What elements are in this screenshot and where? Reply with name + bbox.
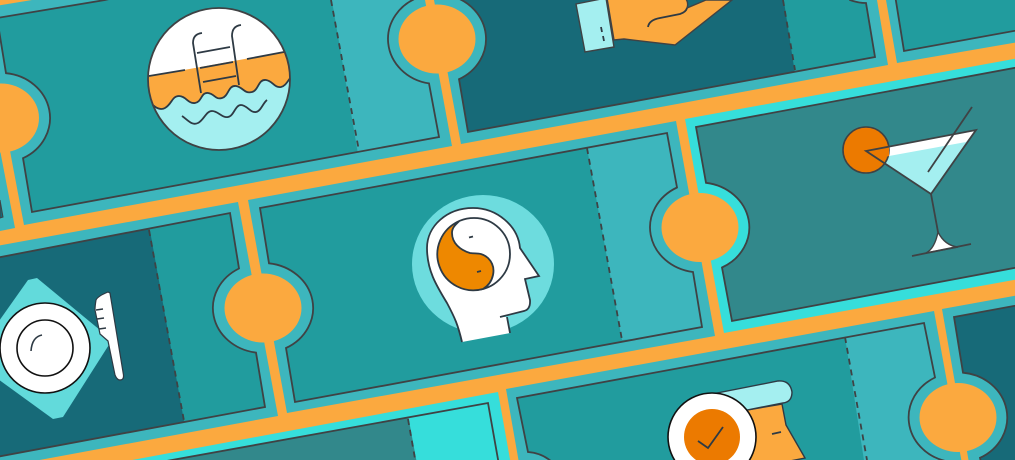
icon: head with checkmark badge: [668, 381, 805, 460]
ticket: top right: [886, 0, 1015, 63]
far left ticket sliver: [0, 150, 15, 231]
ticket: checkmark: [506, 311, 970, 460]
ticket: bottom cyan: [100, 392, 511, 460]
ticket: mind: [248, 120, 720, 413]
ticket: hand: [434, 0, 900, 144]
ticket: plate: [0, 202, 280, 460]
icon: hand: [576, 0, 732, 52]
icon: plate and knife: [0, 278, 124, 419]
icon: pool with ladder: [147, 7, 291, 151]
ticket: cocktail: [685, 56, 1015, 333]
icon: head with yin yang: [412, 195, 554, 342]
icon: cocktail glass: [843, 107, 976, 256]
ticket: bottom right: [942, 293, 1015, 460]
ticket: pool: [0, 0, 460, 225]
